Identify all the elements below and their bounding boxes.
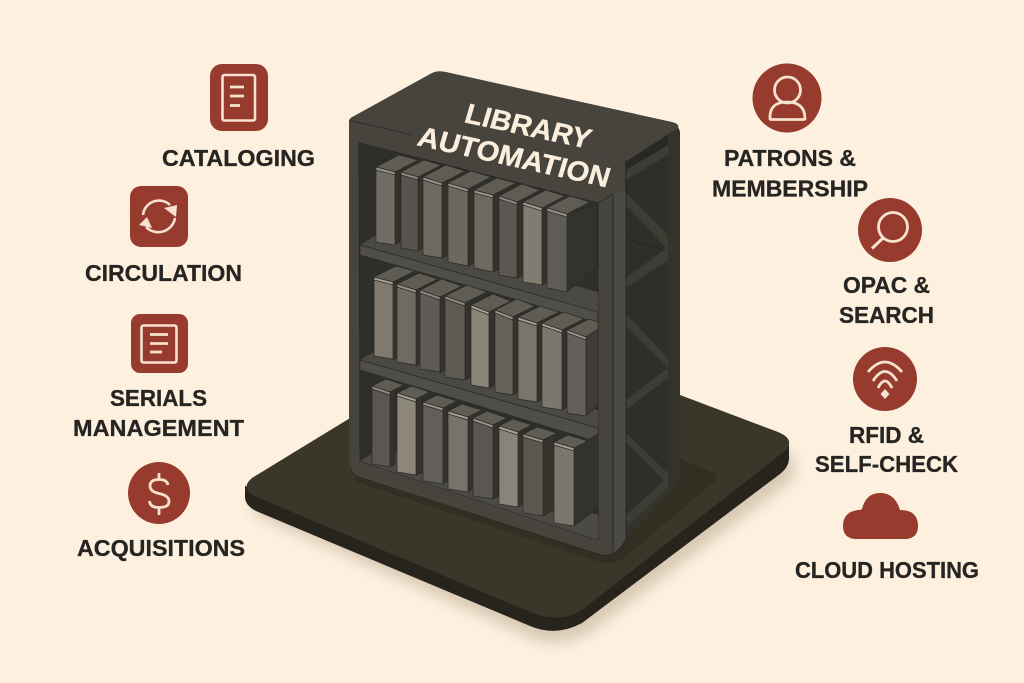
icon: document (210, 64, 268, 131)
label: cataloging: CATALOGING (162, 145, 315, 171)
label: circulation: CIRCULATION (85, 260, 242, 286)
shelf interior (359, 143, 598, 540)
icon: circular arrows (130, 186, 188, 247)
shelf front frame (349, 122, 625, 555)
label: rfid and self-check: SELF-CHECK (815, 451, 958, 477)
books: bottom row (372, 379, 598, 526)
books: top row (376, 155, 597, 292)
title on top of shelf: LIBRARY (461, 98, 596, 155)
title on top of shelf (414, 98, 614, 193)
books: middle row (374, 266, 598, 416)
label: serials management: SERIALS (110, 385, 207, 411)
label: serials management: MANAGEMENT (73, 415, 244, 441)
item: cloud hosting (795, 493, 979, 583)
item: rfid and self-check (815, 347, 958, 477)
label: cloud hosting: CLOUD HOSTING (795, 557, 979, 583)
platform base (245, 395, 795, 643)
item: acquisitions (77, 462, 245, 561)
label: patrons and membership: MEMBERSHIP (712, 176, 868, 202)
icon: dollar coin (128, 462, 190, 524)
label: opac and search (839, 272, 934, 328)
icon: magnifying glass (858, 198, 922, 262)
label: serials management (73, 385, 244, 441)
label: rfid and self-check: RFID & (849, 422, 924, 448)
label: opac and search: SEARCH (839, 302, 934, 328)
shelf right side panel (612, 125, 680, 552)
shelf boards (360, 232, 598, 540)
item: patrons and membership (712, 64, 868, 202)
label: rfid and self-check (815, 422, 958, 477)
icon: person (752, 64, 822, 132)
shelf shadow on platform (352, 455, 717, 563)
label: opac and search: OPAC & (843, 272, 930, 298)
icon: wireless signal (853, 347, 917, 411)
item: circulation (85, 186, 242, 286)
title on top of shelf: AUTOMATION (414, 121, 614, 193)
bookshelf (349, 71, 680, 555)
item: opac and search (839, 198, 934, 328)
shelf top face (349, 71, 678, 200)
label: patrons and membership: PATRONS & (724, 145, 856, 171)
icon: serial document (131, 314, 188, 373)
label: acquisitions: ACQUISITIONS (77, 535, 245, 561)
item: serials management (73, 314, 244, 441)
label: patrons and membership (712, 145, 868, 202)
icon: cloud (843, 493, 918, 539)
item: cataloging (162, 64, 315, 171)
